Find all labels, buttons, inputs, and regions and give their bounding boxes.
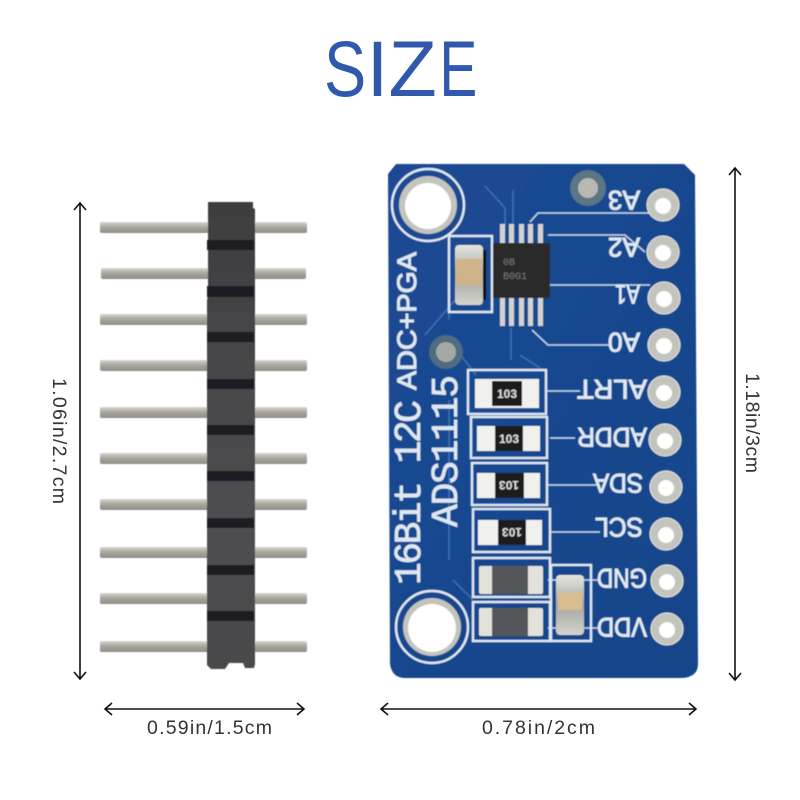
title: S — [324, 25, 366, 114]
board title text: ADS1115 — [426, 375, 469, 527]
pin header — [100, 202, 307, 669]
title — [324, 24, 477, 114]
small pads — [429, 170, 606, 369]
title: E — [439, 25, 477, 113]
resistors: 103 — [497, 387, 517, 401]
title: I — [366, 24, 388, 113]
pin labels: A3 — [608, 185, 640, 215]
header pins — [100, 222, 307, 652]
pin labels: ADDR — [577, 422, 647, 452]
capacitor top — [449, 236, 492, 312]
pin labels: A0 — [608, 327, 640, 357]
connector holes — [647, 189, 683, 645]
title: Z — [388, 24, 437, 113]
circuit board — [388, 164, 698, 678]
mounting hole: top left — [392, 169, 464, 241]
pin labels — [577, 185, 647, 642]
dimension: header width: 0.59in/1.5cm — [147, 717, 272, 739]
dimension: header width — [105, 703, 304, 739]
board title text — [389, 252, 469, 585]
IC chip: B0G1 — [503, 272, 527, 283]
dimension: board height: 1.18in/3cm — [741, 373, 763, 473]
IC chip: 0B — [503, 258, 515, 269]
dimension: header height — [48, 203, 86, 679]
pin labels: SDA — [593, 468, 643, 498]
capacitor bottom — [551, 565, 591, 641]
board title text: 16Bit 12C — [389, 400, 432, 585]
pin labels: VDD — [597, 612, 647, 642]
dimension: header height: 1.06in/2.7cm — [48, 378, 70, 504]
resistors — [468, 370, 550, 552]
dimension: board height — [729, 168, 763, 680]
resistors: 103 — [499, 432, 519, 446]
resistors: 103 — [502, 525, 522, 539]
pin labels: A2 — [608, 232, 640, 262]
dimension: board width — [381, 703, 696, 739]
IC chip — [493, 224, 550, 326]
mounting hole: bottom left — [396, 591, 468, 663]
dimension: board width: 0.78in/2cm — [482, 717, 595, 739]
pin labels: ALRT — [577, 374, 647, 404]
pin labels: A1 — [615, 279, 640, 309]
board title text: ADC+PGA — [392, 252, 422, 390]
pin labels: SCL — [595, 512, 643, 542]
traces — [425, 186, 650, 628]
pin labels: GND — [597, 563, 647, 593]
inductors — [473, 558, 550, 641]
housing notches — [207, 240, 254, 621]
resistors: 103 — [499, 478, 519, 492]
plastic housing — [207, 202, 255, 669]
board body — [388, 164, 698, 678]
